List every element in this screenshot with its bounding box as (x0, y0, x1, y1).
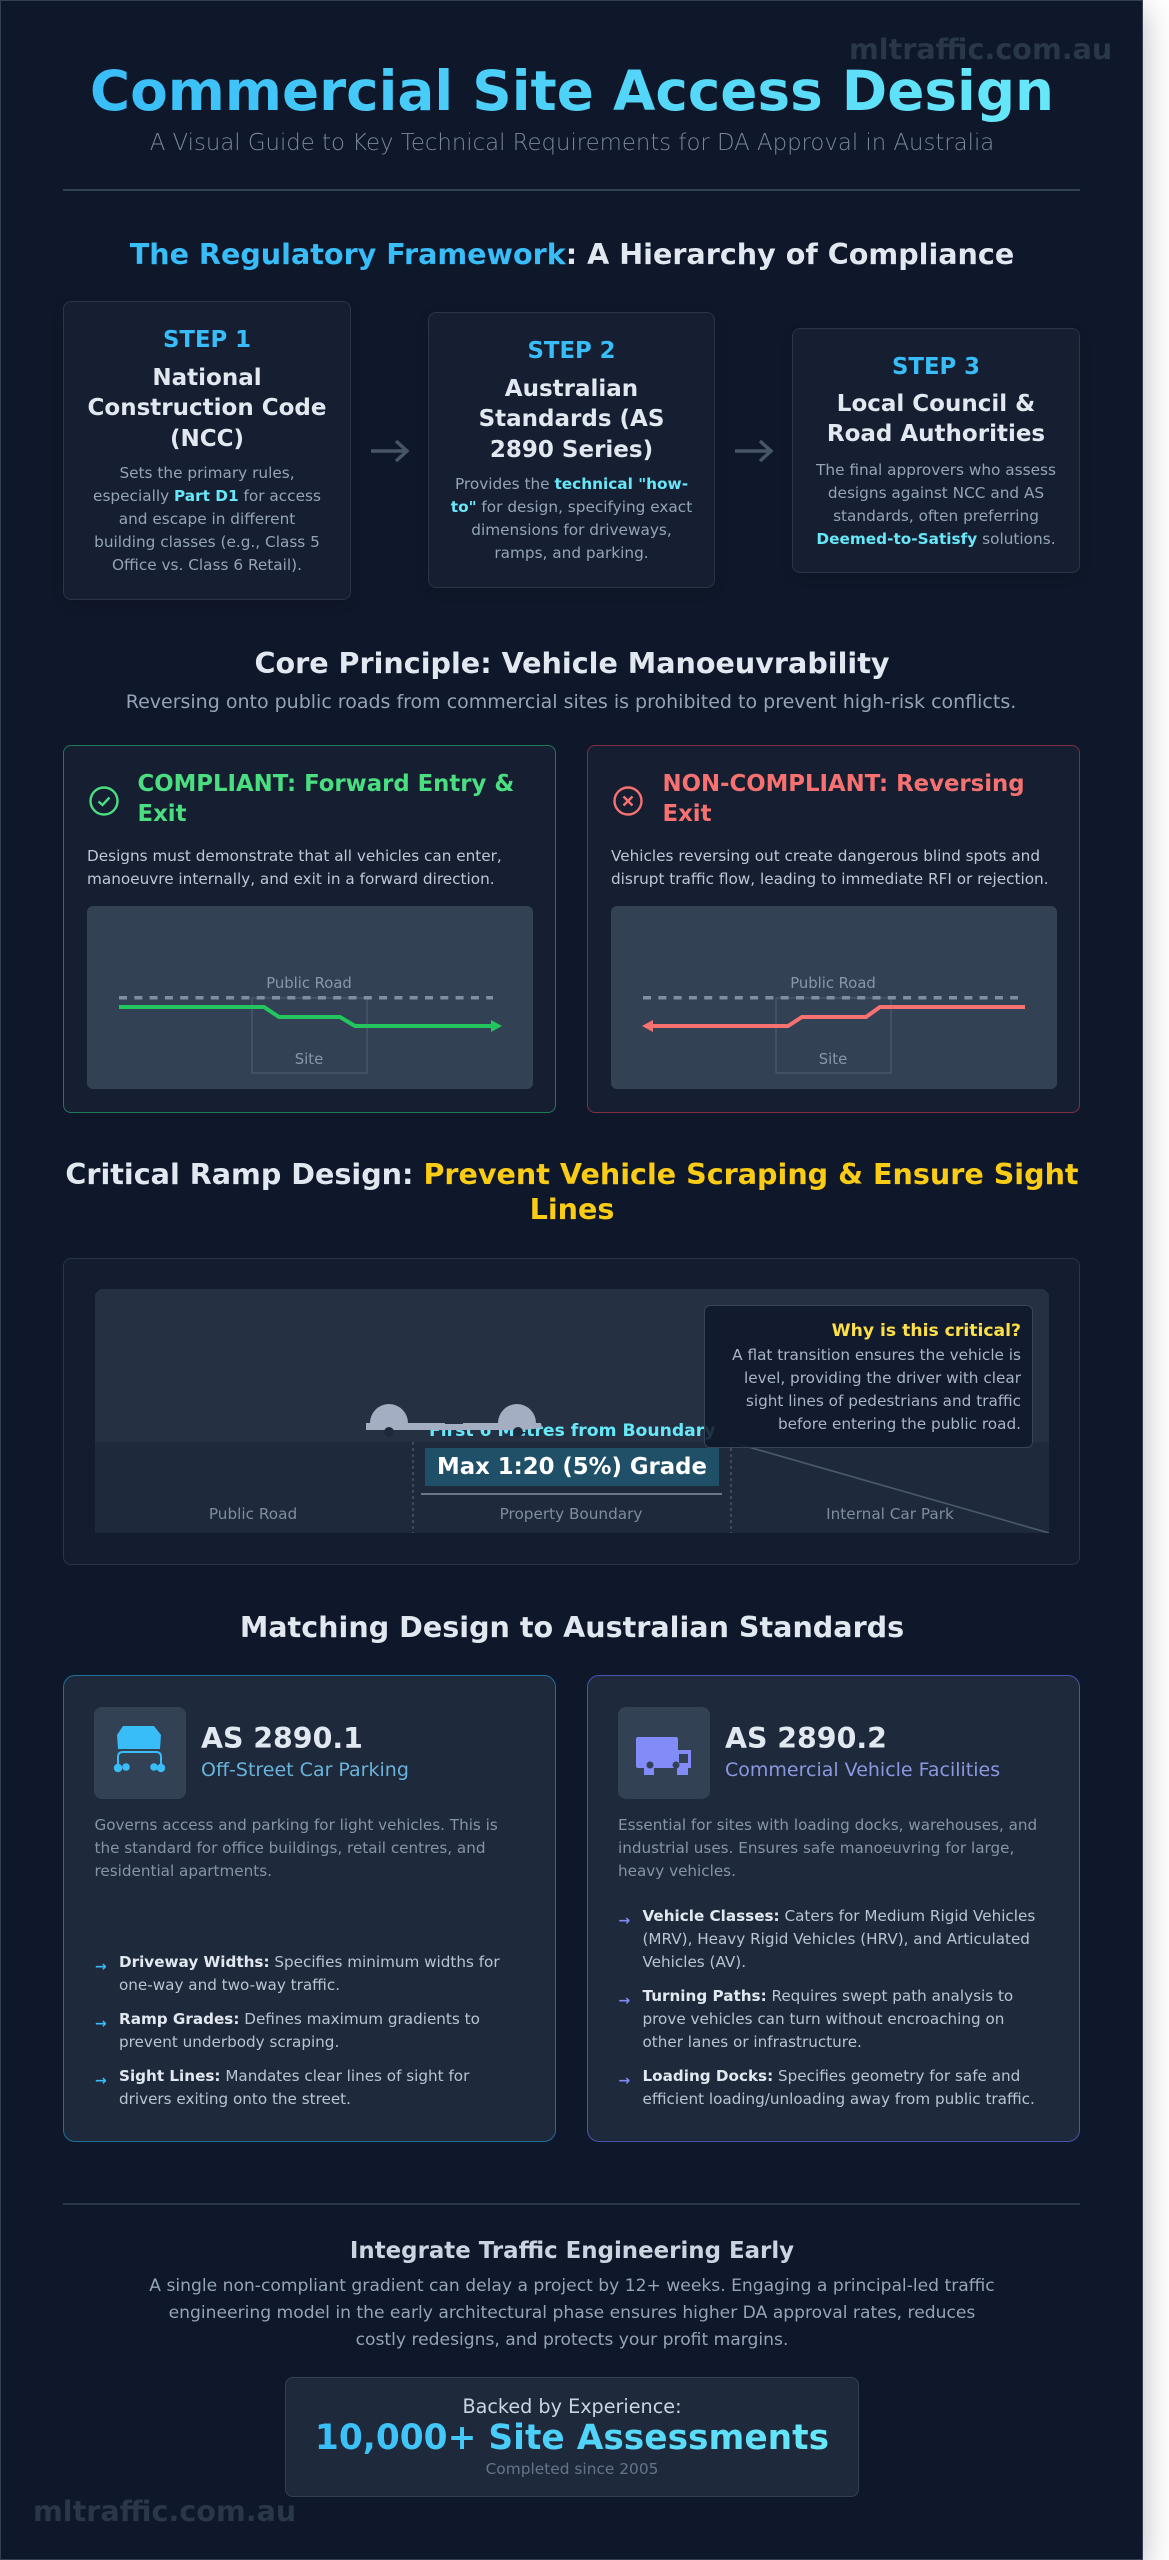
panel: step 2 (428, 312, 715, 588)
item: ramp grades: prevent underbody scraping. (119, 2033, 339, 2051)
arrow bullet 2: → (95, 2016, 107, 2032)
AS 2890.2 description (618, 1816, 1037, 1880)
item: driveway widths: one-way and two-way traffic. (119, 1976, 340, 1994)
step 1 description: Sets the primary rules, (119, 464, 295, 482)
label: first 6 metres: First 6 Metres from Boundary (429, 1421, 715, 1441)
step 3 description: standards, often preferring (833, 507, 1039, 525)
divider (63, 189, 1080, 191)
AS 2890.2 description: heavy vehicles. (618, 1862, 736, 1880)
stat box (285, 2377, 859, 2497)
non-compliant diagram: Public Road (790, 975, 876, 992)
item: driveway widths: Driveway Widths: Specifies minimum widths for (119, 1953, 500, 1971)
heading: integrate traffic engineering: Integrate Traffic Engineering Early (350, 2238, 794, 2264)
icon: check circle (89, 786, 119, 816)
item: vehicle classes: (MRV), Heavy Rigid Vehicles (HRV), and Articulated (642, 1930, 1030, 1948)
stat value: 10,000+ Site Assessments (315, 2418, 829, 2458)
item: loading docks (642, 2067, 1035, 2108)
AS 2890.2 title: AS 2890.2 (725, 1722, 887, 1755)
item: vehicle classes: Vehicle Classes: Caters for Medium Rigid Vehicles (642, 1907, 1035, 1925)
AS 2890.1 title: AS 2890.1 (201, 1722, 363, 1755)
arrow bullet 1: → (95, 1959, 107, 1975)
icon: truck (618, 1707, 710, 1799)
arrow bullet 3: → (618, 2073, 630, 2089)
step 3 title (827, 391, 1045, 447)
item: driveway widths (119, 1953, 500, 1994)
closing text: costly redesigns, and protects your profit margins. (356, 2330, 788, 2350)
step 1 description (93, 464, 321, 574)
panel: AS 2890.2 (587, 1675, 1080, 2142)
compliant diagram: Public Road (266, 975, 352, 992)
step 1 title (88, 365, 326, 452)
callout text: sight lines of pedestrians and traffic (746, 1392, 1021, 1410)
watermark: bottom left: mltraffic.com.au (33, 2494, 296, 2528)
arrow: step 1 to 2 (371, 440, 410, 462)
step 1 description: building classes (e.g., Class 5 (94, 533, 320, 551)
compliant heading: Exit (138, 801, 186, 827)
step 1 title: (NCC) (170, 426, 244, 452)
step 2 title: Standards (AS (479, 406, 664, 432)
step 1 title: Construction Code (88, 395, 326, 421)
AS 2890.2 subtitle: Commercial Vehicle Facilities (725, 1759, 1000, 1781)
icon: cross circle (613, 786, 643, 816)
item: sight lines: Sight Lines: Mandates clear lines of sight for (119, 2067, 469, 2085)
item: sight lines: drivers exiting onto the street. (119, 2090, 351, 2108)
step 3 description: designs against NCC and AS (828, 484, 1044, 502)
label: property boundary: Property Boundary (500, 1505, 642, 1523)
step 1 title: National (152, 365, 262, 391)
subtitle: A Visual Guide to Key Technical Requirements for DA Approval in Australia (150, 130, 994, 156)
label: public road: Public Road (209, 1505, 297, 1523)
step 3 label: STEP 3 (892, 354, 980, 380)
non-compliant heading: NON-COMPLIANT: Reversing (662, 770, 1025, 796)
step 2 description (450, 475, 692, 562)
panel: AS 2890.1 (63, 1675, 556, 2142)
boundary lines and slope (412, 1442, 1049, 1533)
step 3 title: Local Council & (837, 391, 1035, 417)
badge: max grade (425, 1448, 719, 1486)
label: internal car park: Internal Car Park (826, 1505, 954, 1523)
AS 2890.1 description: the standard for office buildings, retail centres, and (94, 1839, 486, 1857)
closing text: A single non-compliant gradient can delay a project by 12+ weeks. Engaging a principal-led traffic (149, 2276, 995, 2296)
step 2 label: STEP 2 (527, 338, 616, 364)
heading: critical ramp design: Critical Ramp Design: Prevent Vehicle Scraping & Ensure Sight (65, 1157, 1079, 1191)
heading: core principle: Core Principle: Vehicle Manoeuvrability (254, 646, 890, 680)
item: turning paths: other lanes or infrastructure. (642, 2033, 862, 2051)
item: sight lines (119, 2067, 470, 2108)
item: turning paths: prove vehicles can turn without encroaching on (642, 2010, 1004, 2028)
arrow: step 2 to 3 (735, 440, 774, 462)
AS 2890.1 subtitle: Off-Street Car Parking (201, 1759, 409, 1781)
non-compliant heading (662, 770, 1025, 827)
AS 2890.1 list (95, 1953, 500, 2108)
item: turning paths: Turning Paths: Requires swept path analysis to (642, 1987, 1013, 2005)
compliant description (87, 846, 502, 888)
compliant heading (138, 770, 514, 827)
callout text: A flat transition ensures the vehicle is (732, 1346, 1021, 1364)
stat label: Backed by Experience: (462, 2395, 682, 2418)
panel: non-compliant (587, 745, 1080, 1113)
compliant diagram: Site (295, 1051, 323, 1068)
panel: step 1 (63, 301, 351, 600)
heading: critical ramp design (65, 1157, 1079, 1226)
title: Commercial Site Access Design (90, 59, 1054, 123)
item: vehicle classes: Vehicles (AV). (642, 1953, 746, 1971)
closing text (149, 2276, 995, 2350)
item: loading docks: Loading Docks: Specifies geometry for safe and (642, 2067, 1020, 2085)
ramp diagram scene (95, 1289, 1049, 1533)
AS 2890.2 description: industrial uses. Ensures safe manoeuvring for large, (618, 1839, 1014, 1857)
non-compliant description: Vehicles reversing out create dangerous blind spots and (611, 846, 1040, 864)
item: ramp grades: Ramp Grades: Defines maximum gradients to (119, 2010, 480, 2028)
icon: car silhouette (366, 1404, 542, 1436)
step 3 description: The final approvers who assess (816, 461, 1056, 479)
step 2 description: ramps, and parking. (494, 544, 649, 562)
callout text: level, providing the driver with clear (744, 1369, 1021, 1387)
step 1 label: STEP 1 (163, 327, 251, 353)
step 2 description: dimensions for driveways, (471, 521, 672, 539)
AS 2890.2 description: Essential for sites with loading docks, warehouses, and (618, 1816, 1037, 1834)
step 2 description: Provides the technical "how- (455, 475, 688, 493)
callout text (732, 1346, 1021, 1433)
badge: max grade: Max 1:20 (5%) Grade (437, 1454, 707, 1480)
non-compliant description: disrupt traffic flow, leading to immediate RFI or rejection. (611, 870, 1049, 888)
compliant description: Designs must demonstrate that all vehicles can enter, (87, 846, 502, 864)
panel: compliant (63, 745, 556, 1113)
icon: car (94, 1707, 186, 1799)
arrow bullet 3: → (95, 2073, 107, 2089)
step 1 description: especially Part D1 for access (93, 487, 321, 505)
item: loading docks: efficient loading/unloading away from public traffic. (642, 2090, 1035, 2108)
item: turning paths (642, 1987, 1013, 2051)
AS 2890.2 list (618, 1907, 1035, 2108)
AS 2890.1 description: residential apartments. (94, 1862, 272, 1880)
step 2 title: Australian (505, 376, 638, 402)
compliant heading: COMPLIANT: Forward Entry & (138, 770, 514, 796)
non-compliant diagram (611, 906, 1057, 1089)
heading: regulatory framework: The Regulatory Framework: A Hierarchy of Compliance (130, 236, 1014, 270)
non-compliant heading: Exit (662, 801, 712, 827)
sky area (95, 1289, 1049, 1442)
non-compliant diagram: Site (819, 1051, 847, 1068)
step 2 title (479, 376, 664, 463)
item: vehicle classes (642, 1907, 1035, 1971)
heading: critical ramp design: Lines (530, 1192, 614, 1226)
compliant description: manoeuvre internally, and exit in a forward direction. (87, 870, 495, 888)
subheading: core principle: Reversing onto public roads from commercial sites is prohibited to prevent high-risk conflicts. (126, 691, 1016, 713)
divider (63, 2203, 1080, 2205)
step 3 description (816, 461, 1056, 548)
callout text: before entering the public road. (778, 1415, 1021, 1433)
closing text: engineering model in the early architectural phase ensures higher DA approval rates, reduces (169, 2303, 975, 2323)
callout: why critical (704, 1305, 1033, 1448)
step 3 title: Road Authorities (827, 421, 1045, 447)
panel: step 3 (792, 328, 1080, 573)
stat note: Completed since 2005 (486, 2460, 658, 2478)
step 1 description: and escape in different (119, 510, 295, 528)
item: ramp grades (119, 2010, 480, 2051)
AS 2890.1 description: Governs access and parking for light vehicles. This is (94, 1816, 498, 1834)
step 2 description: to" for design, specifying exact (451, 498, 692, 516)
step 3 description: Deemed-to-Satisfy solutions. (816, 530, 1056, 548)
panel: ramp diagram (63, 1258, 1080, 1565)
AS 2890.1 description (94, 1816, 498, 1880)
compliant diagram (87, 906, 533, 1089)
non-compliant description (611, 846, 1049, 888)
arrow bullet 2: → (618, 1993, 630, 2009)
arrow bullet 1: → (618, 1913, 630, 1929)
heading: matching design: Matching Design to Australian Standards (240, 1610, 904, 1644)
watermark: top right: mltraffic.com.au (849, 32, 1112, 66)
step 2 title: 2890 Series) (490, 437, 653, 463)
callout title: Why is this critical? (832, 1321, 1021, 1341)
step 1 description: Office vs. Class 6 Retail). (112, 556, 302, 574)
